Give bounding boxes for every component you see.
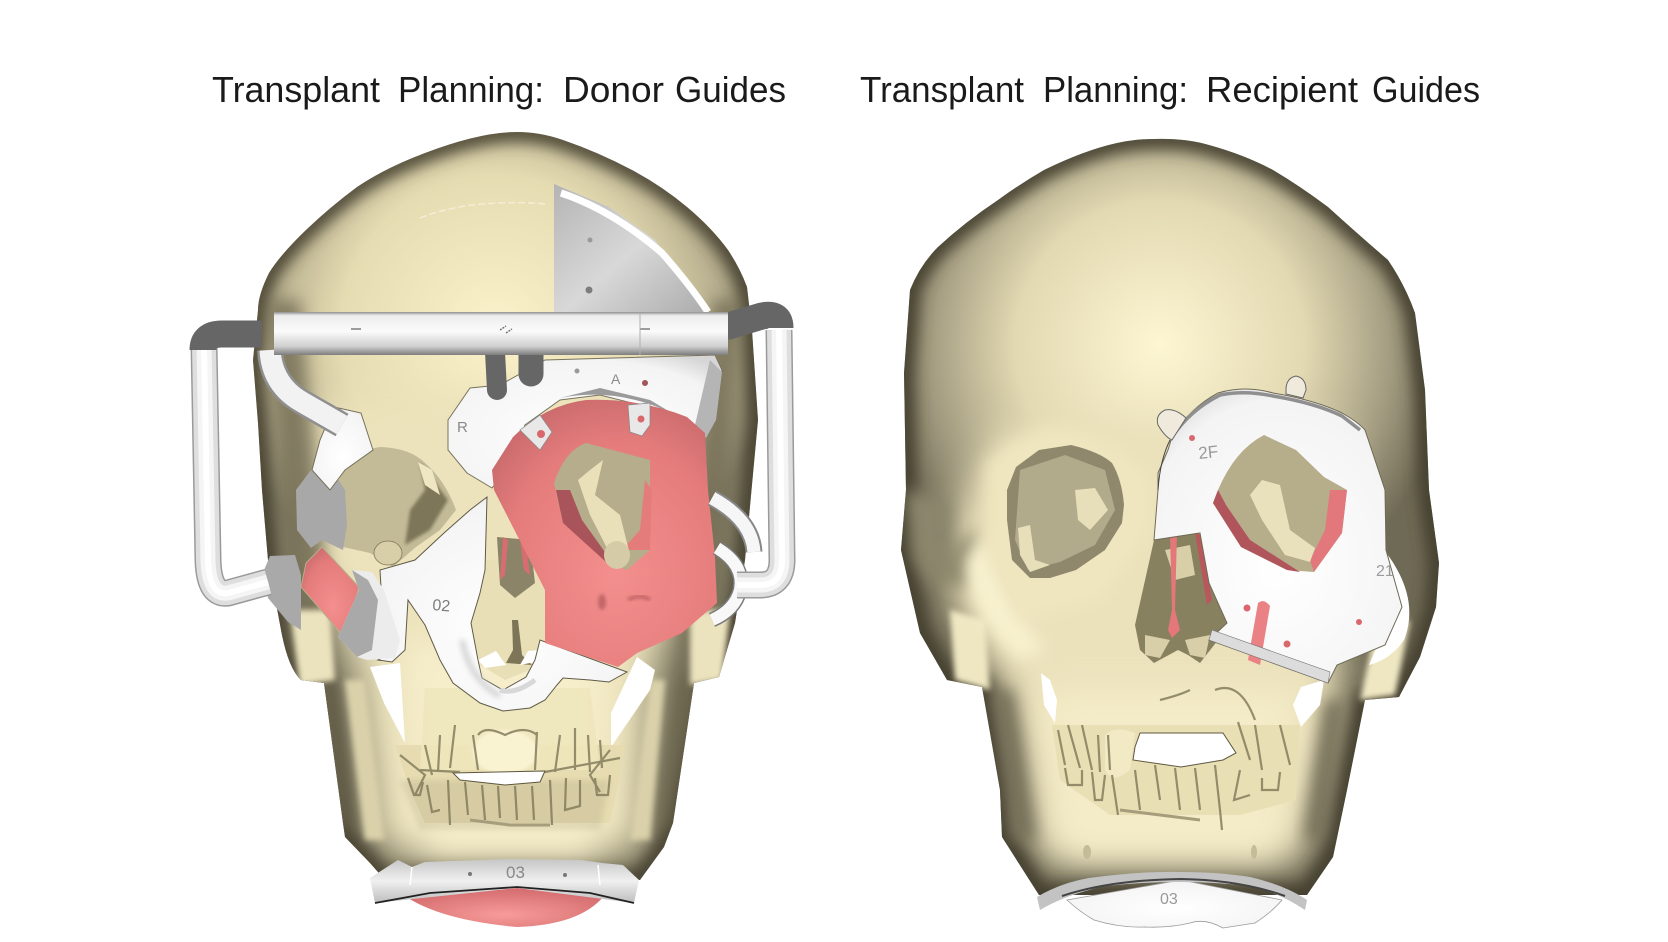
title: donor guides: Planning: [398, 69, 544, 110]
bracket arm: right [725, 315, 782, 585]
orbital plate guide: R [457, 419, 468, 436]
upper white guide block [312, 407, 373, 490]
white guide 02 [378, 497, 627, 711]
guide tabs: recipient [1157, 376, 1306, 440]
jaw marks: recipient [1083, 845, 1257, 859]
brow ridge: recipient [985, 428, 1150, 620]
title: recipient guides: Guides [1372, 69, 1480, 110]
horizontal cutting bar [274, 312, 728, 355]
cheek pieces: grey and pink [262, 470, 400, 660]
white orbital guide: recipient [1154, 389, 1402, 683]
right clamp crescent [1369, 555, 1409, 665]
jaw gaps [1041, 673, 1324, 727]
pegs [495, 352, 531, 390]
nasal cavity: donor [471, 537, 545, 680]
skull silhouette: donor [253, 132, 758, 880]
chin guide: donor [370, 859, 639, 927]
white orbital guide: recipient: 2F [1197, 442, 1219, 463]
pink midface graft [492, 400, 717, 667]
pink strip [1248, 601, 1270, 665]
right orbit opening [1213, 435, 1347, 572]
skull silhouette: recipient [901, 139, 1439, 895]
title: donor guides: Guides [675, 69, 786, 110]
title: recipient guides: Recipient [1206, 69, 1358, 110]
orbital plate guide: A [611, 371, 621, 387]
title: donor guides: Donor [563, 69, 664, 110]
white guide 02: 02 [432, 597, 451, 616]
title: recipient guides: Transplant [860, 69, 1024, 110]
title: donor guides [212, 69, 786, 110]
curved support tube [270, 350, 342, 425]
looping tube and clamp [712, 498, 754, 620]
left orbit: recipient [1007, 445, 1124, 578]
chin guide: recipient: 03 [1160, 891, 1178, 908]
title: recipient guides [860, 69, 1480, 110]
nasal cavity: recipient [1135, 530, 1227, 663]
bracket arm: left [203, 334, 268, 593]
jaw gaps [370, 657, 655, 747]
orbital plate guide [448, 355, 722, 488]
title: recipient guides: Planning: [1043, 69, 1188, 110]
chin guide: recipient [1037, 872, 1307, 928]
teeth: donor [395, 688, 625, 830]
panel: donor skull with guides [203, 132, 782, 927]
chin guide: donor: 03 [506, 863, 525, 882]
panel: recipient skull with guides [901, 139, 1439, 928]
cranial plate guide [420, 184, 708, 320]
pink graft tabs [520, 403, 650, 450]
left orbit: donor [334, 447, 456, 567]
teeth: recipient [1052, 688, 1300, 830]
white orbital guide: recipient: 21 [1376, 563, 1394, 580]
title: donor guides: Transplant [212, 69, 380, 110]
